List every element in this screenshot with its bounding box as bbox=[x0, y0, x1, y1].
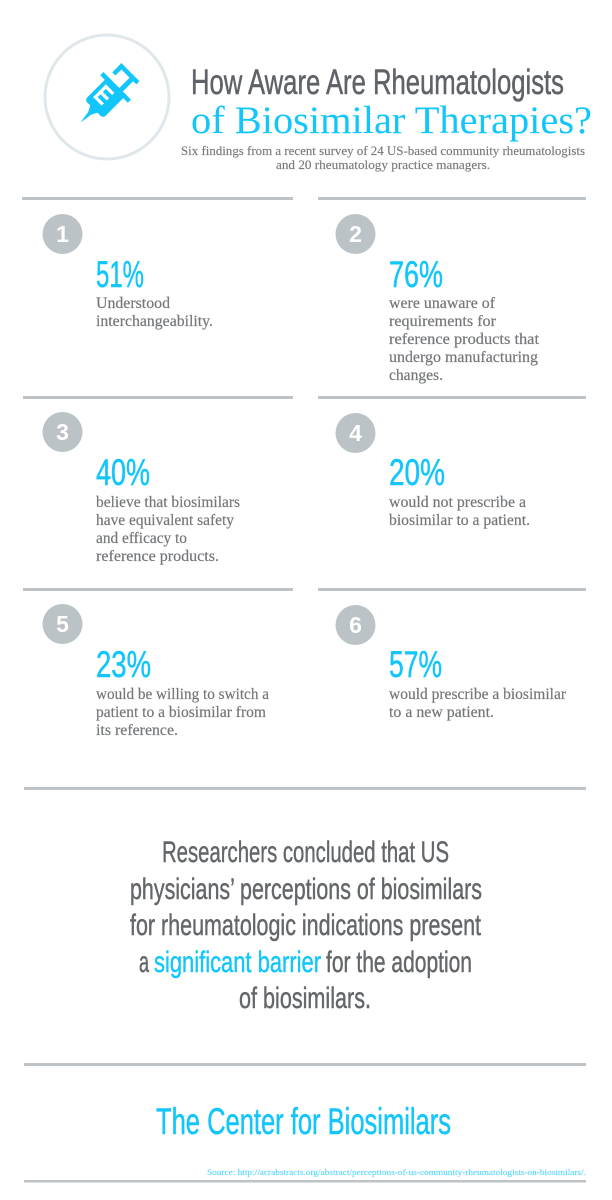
finding 4: 20% bbox=[389, 452, 445, 493]
conclusion text bbox=[130, 836, 482, 1015]
finding 3: 40% bbox=[96, 452, 150, 493]
finding 2: 2 bbox=[349, 221, 362, 247]
finding 6: would prescribe a biosimilar bbox=[389, 686, 567, 703]
finding 5: 23% bbox=[96, 644, 151, 685]
conclusion text: a bbox=[139, 946, 149, 979]
footer brand: The Center for Biosimilars bbox=[156, 1101, 451, 1142]
finding 5: patient to a biosimilar from bbox=[96, 704, 266, 721]
finding 2 bbox=[336, 214, 540, 384]
conclusion text: for rheumatologic indications present bbox=[130, 909, 481, 942]
finding 1: interchangeability. bbox=[96, 313, 213, 330]
finding 1: 1 bbox=[56, 221, 69, 247]
finding 5: 5 bbox=[56, 611, 69, 637]
finding 1: Understood bbox=[96, 295, 170, 312]
finding 3: have equivalent safety bbox=[96, 512, 234, 529]
finding 3 bbox=[42, 412, 240, 565]
finding 3: reference products. bbox=[96, 548, 219, 565]
finding 2: were unaware of bbox=[389, 295, 496, 312]
finding 3: 3 bbox=[56, 419, 69, 445]
finding 5: its reference. bbox=[96, 722, 178, 739]
finding 6 bbox=[336, 605, 567, 721]
finding 1: 51% bbox=[96, 254, 144, 295]
finding 2: requirements for bbox=[389, 313, 497, 330]
finding 2: reference products that bbox=[389, 331, 540, 348]
finding 2: undergo manufacturing bbox=[389, 349, 538, 366]
conclusion text: physicians’ perceptions of biosimilars bbox=[130, 873, 482, 906]
title: of Biosimilar Therapies? bbox=[191, 99, 592, 142]
subtitle: and 20 rheumatology practice managers. bbox=[276, 157, 490, 172]
conclusion text: Researchers concluded that US bbox=[162, 836, 449, 869]
conclusion text: of biosimilars. bbox=[239, 982, 371, 1015]
finding 6: to a new patient. bbox=[389, 704, 494, 721]
finding 4 bbox=[336, 413, 530, 529]
subtitle bbox=[181, 143, 585, 172]
subtitle: Six findings from a recent survey of 24 US-based community rheumatologists bbox=[181, 143, 585, 158]
finding 3: and efficacy to bbox=[96, 530, 187, 547]
finding 1 bbox=[42, 214, 213, 330]
finding 2: 76% bbox=[389, 254, 443, 295]
finding 4: biosimilar to a patient. bbox=[389, 512, 530, 529]
source: Source: http://acrabstracts.org/abstract/perceptions-of-us-community-rheumatologists-on-biosimilars/. bbox=[207, 1167, 586, 1177]
title bbox=[191, 63, 592, 142]
finding 4: 4 bbox=[349, 420, 362, 446]
conclusion text: for the adoption bbox=[326, 946, 472, 979]
finding 2: changes. bbox=[389, 367, 443, 384]
finding 4: would not prescribe a bbox=[389, 494, 526, 511]
finding 6: 57% bbox=[389, 644, 442, 685]
finding 6: 6 bbox=[349, 612, 362, 638]
conclusion text: significant barrier bbox=[154, 946, 321, 979]
finding 5: would be willing to switch a bbox=[96, 686, 269, 703]
finding 3: believe that biosimilars bbox=[96, 494, 240, 511]
icon: syringe in circle bbox=[45, 35, 169, 159]
finding 5 bbox=[42, 604, 269, 739]
